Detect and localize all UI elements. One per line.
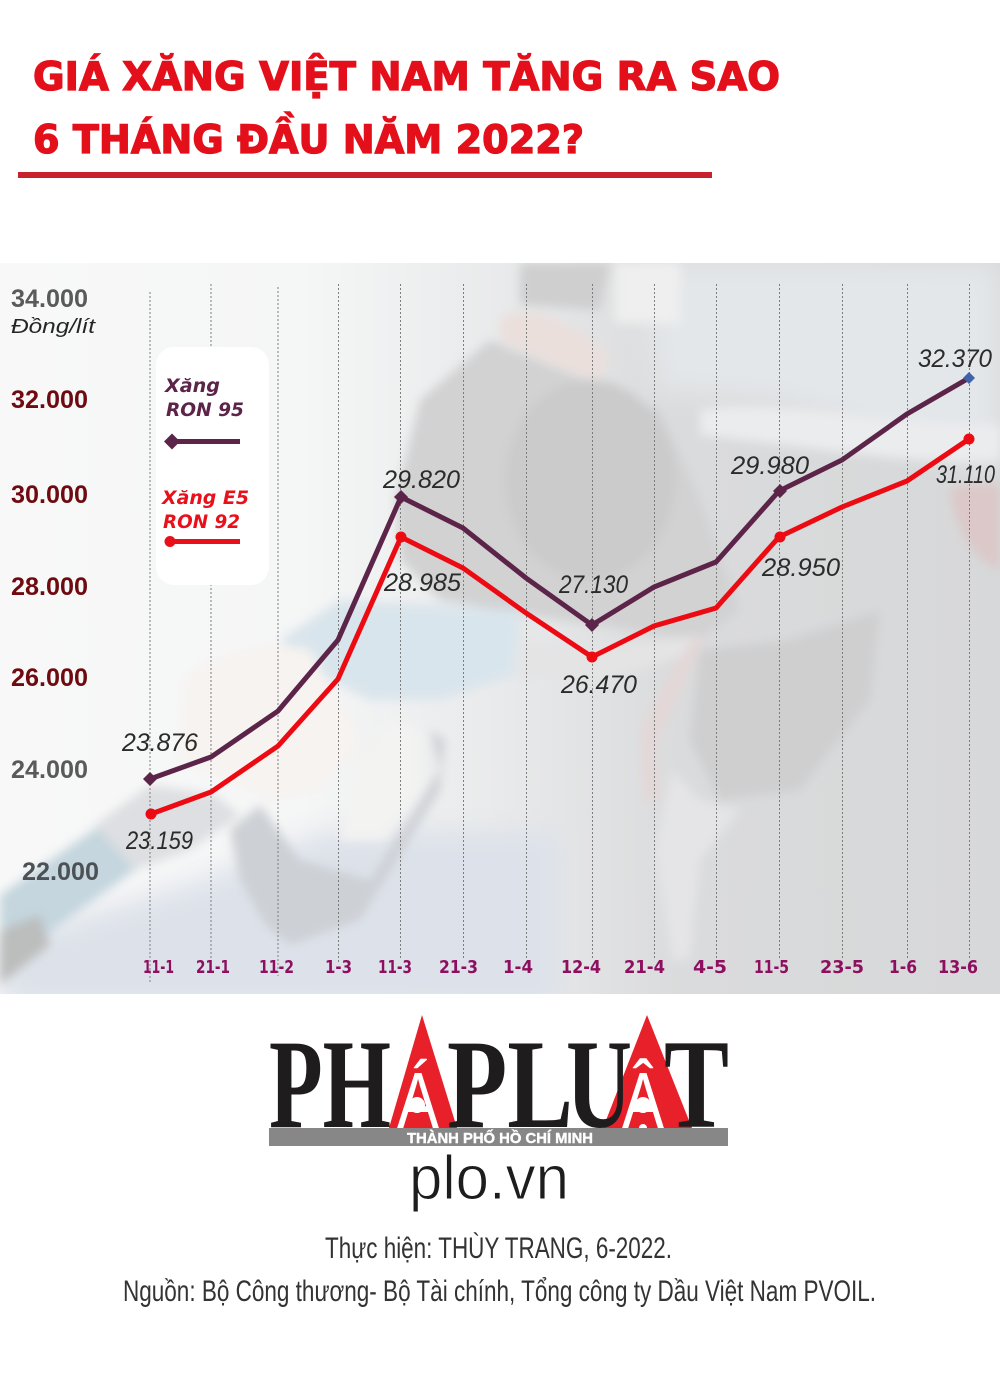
data value labels: 23.159 bbox=[125, 827, 193, 855]
vertical date grid lines bbox=[150, 284, 970, 982]
x axis date labels: 21-1 bbox=[196, 957, 230, 978]
title bbox=[33, 53, 780, 163]
legend: RON 95: RON 95 bbox=[166, 399, 244, 421]
x axis date labels: 13-6 bbox=[938, 957, 978, 978]
credits: Thực hiện: THÙY TRANG, 6-2022. bbox=[325, 1232, 672, 1265]
x axis date labels: 23-5 bbox=[820, 957, 864, 978]
y axis labels bbox=[11, 285, 99, 886]
legend: RON 95: Xăng bbox=[164, 375, 220, 397]
y axis labels: 28.000 bbox=[11, 573, 88, 601]
line chart: E5 RON 92 bbox=[146, 434, 974, 820]
data value labels: 29.980 bbox=[730, 452, 809, 480]
legend panel bbox=[156, 347, 269, 585]
legend: E5 RON 92: RON 92 bbox=[163, 511, 240, 533]
title: 6 THÁNG ĐẦU NĂM 2022? bbox=[33, 111, 584, 163]
legend: E5 RON 92: Xăng E5 bbox=[161, 487, 249, 509]
logo: Pháp Luật bbox=[269, 1015, 729, 1155]
x axis date labels: 11-5 bbox=[754, 957, 789, 978]
x axis date labels: 1-6 bbox=[889, 957, 917, 978]
x axis date labels: 21-4 bbox=[624, 957, 665, 978]
x axis date labels: 11-2 bbox=[259, 957, 294, 978]
logo: wordmark: T bbox=[664, 1015, 729, 1155]
x axis date labels: 1-4 bbox=[503, 957, 533, 978]
logo: red A marks bbox=[389, 1015, 692, 1128]
website: plo.vn bbox=[409, 1144, 569, 1213]
data value labels: 23.876 bbox=[121, 729, 198, 757]
y axis labels: 24.000 bbox=[11, 756, 88, 784]
x axis date labels: 1-3 bbox=[325, 957, 352, 978]
background photo: fuel nozzle and car bbox=[0, 263, 1000, 1010]
credits bbox=[123, 1232, 876, 1308]
x axis date labels: 21-3 bbox=[439, 957, 478, 978]
y axis unit: Đồng/lít bbox=[11, 316, 97, 338]
logo: wordmark: PH bbox=[269, 1015, 391, 1155]
data value labels: 28.950 bbox=[761, 554, 840, 582]
data value labels bbox=[121, 345, 995, 855]
title: GIÁ XĂNG VIỆT NAM TĂNG RA SAO bbox=[33, 53, 780, 100]
logo: white A letters bbox=[397, 1056, 665, 1145]
legend: RON 95 bbox=[164, 375, 244, 450]
logo: grey strap bbox=[269, 1128, 728, 1146]
x axis date labels: 11-3 bbox=[378, 957, 412, 978]
data value labels: 28.985 bbox=[383, 569, 461, 597]
x axis date labels: 11-1 bbox=[143, 957, 174, 978]
data value labels: 32.370 bbox=[918, 345, 992, 373]
data value labels: 26.470 bbox=[560, 671, 637, 699]
title underline bbox=[18, 172, 712, 178]
x axis date labels: 4-5 bbox=[693, 957, 727, 978]
logo: strap text: THÀNH PHỐ HỒ CHÍ MINH bbox=[407, 1129, 593, 1147]
y axis labels: 34.000 bbox=[11, 285, 88, 313]
logo: wordmark bbox=[269, 1015, 729, 1155]
data value labels: 27.130 bbox=[558, 571, 628, 599]
x axis date labels bbox=[143, 957, 978, 978]
y axis labels: 26.000 bbox=[11, 664, 88, 692]
logo: wordmark: PL bbox=[447, 1015, 573, 1155]
y axis labels: 32.000 bbox=[11, 386, 88, 414]
x axis date labels: 12-4 bbox=[561, 957, 601, 978]
y axis labels: 30.000 bbox=[11, 481, 88, 509]
data value labels: 29.820 bbox=[382, 466, 460, 494]
logo: white A letters: Â bbox=[622, 1056, 665, 1145]
line chart: RON 95 bbox=[143, 372, 975, 786]
logo: wordmark: U bbox=[566, 1015, 632, 1155]
logo: white A letters: Á bbox=[397, 1056, 440, 1145]
y axis labels: 22.000 bbox=[22, 858, 99, 886]
legend: E5 RON 92 bbox=[161, 487, 249, 547]
